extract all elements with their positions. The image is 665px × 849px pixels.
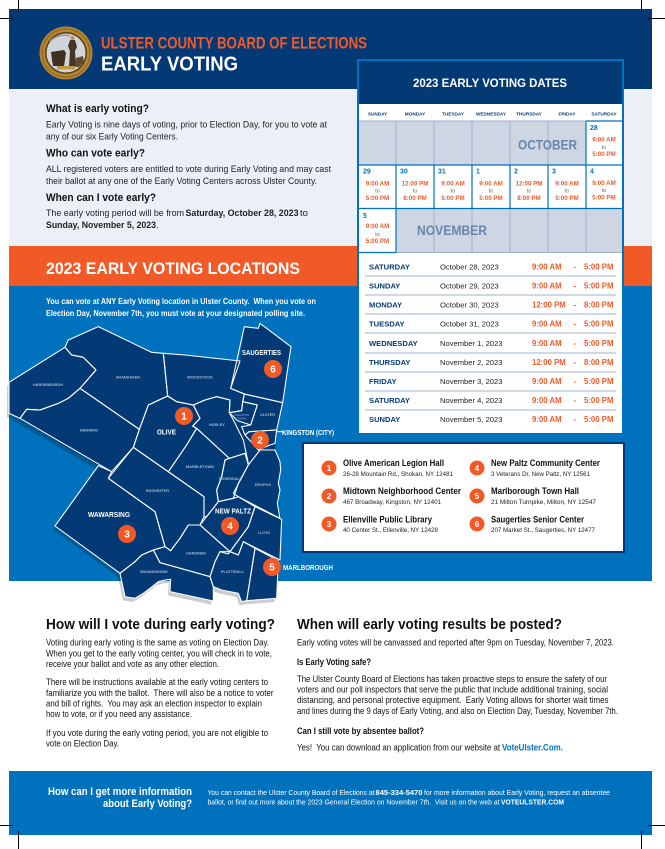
legend marker 3: [322, 516, 336, 532]
schedule list: FRIDAY: [369, 377, 397, 386]
calendar week: Oct 29 to Nov 4: 8:00 PM: [517, 195, 541, 202]
schedule list: -: [574, 301, 576, 310]
schedule list: -: [574, 358, 576, 367]
legend entry 5: 21 Milton Turnpike, Milton, NY 12547: [491, 499, 596, 506]
text: who can vote answer: ALL registered voters are entitled to vote during Early Voting and may cast: [46, 164, 331, 175]
heading: calendar title: 2023 EARLY VOTING DATES: [413, 76, 567, 90]
footer contact text: You can contact the Ulster County Board of Elections at: [208, 788, 375, 797]
panel: location legend: [303, 443, 624, 552]
schedule list: 8:00 PM: [584, 358, 613, 367]
calendar week: Oct 29 to Nov 4: 9:00 AM: [441, 180, 465, 187]
map labels: towns with voting centers: MARLBOROUGH: [283, 565, 333, 572]
legend marker 5: 5: [475, 492, 480, 501]
calendar week: Oct 29 to Nov 4: 8:00 PM: [403, 195, 427, 202]
banner: locations heading: 2023 EARLY VOTING LOCATIONS: [46, 260, 300, 278]
heading: how will I vote: How will I vote during early voting?: [46, 616, 275, 633]
calendar day: Nov 5: to: [375, 232, 380, 238]
footer contact text: for more information about Early Voting, request an absentee: [424, 788, 610, 797]
schedule list: -: [574, 377, 576, 386]
legend marker 2: 2: [327, 492, 332, 501]
schedule list: 9:00 AM: [532, 263, 562, 272]
legend entry 3: 40 Center St., Ellenville, NY 12428: [343, 527, 438, 534]
panel: early voting dates: [358, 60, 623, 434]
schedule list: November 5, 2023: [440, 415, 502, 424]
map labels: towns with voting centers: WAWARSING: [88, 512, 131, 519]
legend entry 6: [491, 515, 595, 534]
heading: what is early voting: What is early voting?: [46, 103, 149, 115]
schedule list: MONDAY: [369, 301, 402, 310]
text: safety body: voters and our poll inspectors that serve the public that include additional training, social: [297, 685, 608, 695]
text: how will I vote body: familiarize you with the ballot. There will also be a notice to voter: [46, 688, 274, 698]
schedule list: October 31, 2023: [440, 320, 499, 329]
schedule list: -: [574, 396, 576, 405]
legend marker 1: [322, 460, 336, 476]
calendar day: Nov 5: 5: [363, 213, 367, 220]
legend marker 4: 4: [475, 464, 480, 473]
schedule list: October 30, 2023: [440, 301, 499, 310]
text: how will I vote body: When you get to the early voting center, you will check in to vote,: [46, 648, 272, 658]
map labels: towns with voting centers: OLIVE: [157, 430, 176, 437]
footer heading: about Early Voting?: [103, 798, 192, 810]
calendar day: Oct 28: to: [602, 145, 606, 151]
text: how will I vote body: receive your ballot and vote as any other election.: [46, 659, 219, 669]
banner: locations heading: [9, 246, 652, 286]
legend marker 4: [470, 460, 484, 476]
heading: calendar title: [359, 61, 622, 104]
calendar week: Oct 29 to Nov 4: to: [375, 188, 380, 194]
schedule list: -: [574, 415, 576, 424]
schedule list: -: [574, 339, 576, 348]
map markers: [118, 360, 282, 576]
footer heading: [48, 786, 192, 810]
text: results body: Early voting votes will be canvassed and reported after 9pm on Tuesday, November 7, 2023.: [297, 638, 614, 648]
map labels: small towns: ROSENDALE: [219, 476, 242, 481]
text: how will I vote body: There will be instructions available at the early voting centers to: [46, 677, 268, 687]
text: how will I vote body: [46, 638, 274, 749]
map: Ulster County towns: [7, 323, 334, 605]
map labels: towns with voting centers: SAUGERTIES: [242, 350, 281, 357]
legend entry 2: Midtown Neighborhood Center: [343, 486, 461, 496]
calendar weekday row: WEDNESDAY: [476, 112, 507, 117]
calendar week: Oct 29 to Nov 4: 12:00 PM: [516, 180, 542, 187]
text: safety body: [297, 674, 618, 716]
calendar day: Nov 5: 5:00 PM: [366, 238, 389, 245]
calendar week: Oct 29 to Nov 4: to: [602, 188, 606, 194]
legend entry 2: [343, 486, 461, 506]
legend marker 5: [470, 488, 484, 504]
legend entry 3: [343, 515, 438, 534]
schedule list: 8:00 PM: [584, 301, 613, 310]
footer band: [9, 771, 652, 835]
month label: October: OCTOBER: [518, 137, 577, 153]
schedule list: [365, 263, 616, 424]
footer contact text: ballot, or find out more about the 2023 General Election on November 7th. Visit us on the web at: [208, 798, 500, 806]
schedule list: SUNDAY: [369, 415, 400, 424]
schedule list: 9:00 AM: [532, 415, 562, 424]
text: what is early voting answer: any of our six Early Voting Centers.: [46, 132, 178, 142]
legend entry 3: Ellenville Public Library: [343, 515, 432, 525]
title: organisation: ULSTER COUNTY BOARD OF ELECTIONS: [101, 35, 367, 53]
legend entry 5: [491, 486, 596, 506]
text: how will I vote body: Voting during early voting is the same as voting on Election Day.: [46, 638, 269, 648]
schedule list: 12:00 PM: [532, 301, 566, 310]
calendar week: Oct 29 to Nov 4: to: [451, 188, 455, 194]
legend entry 1: [343, 458, 453, 478]
schedule list: THURSDAY: [369, 358, 410, 367]
schedule list: SATURDAY: [369, 396, 410, 405]
footer contact text: 845-334-5470: [376, 788, 422, 797]
text: locations intro: [46, 297, 316, 318]
schedule list: 9:00 AM: [532, 339, 562, 348]
calendar week: Oct 29 to Nov 4: 29: [363, 169, 371, 176]
heading: absentee ballot: Can I still vote by absentee ballot?: [297, 726, 424, 736]
map markers: 3: [124, 530, 130, 541]
icon: county seal: [40, 26, 92, 80]
schedule list: 9:00 AM: [532, 282, 562, 291]
calendar day: Oct 28: [590, 125, 616, 158]
text: safety body: distancing, and personal protective equipment. Early Voting allows for shorter wait times: [297, 695, 609, 705]
schedule list: -: [574, 263, 576, 272]
schedule list: November 4, 2023: [440, 396, 502, 405]
legend entry 1: Olive American Legion Hall: [343, 458, 444, 468]
schedule list: 5:00 PM: [584, 282, 613, 291]
calendar week: Oct 29 to Nov 4: 3: [552, 169, 556, 176]
map labels: small towns: ESOPUS: [255, 482, 271, 487]
legend entry 4: New Paltz Community Center: [491, 458, 600, 468]
calendar week: Oct 29 to Nov 4: 5:00 PM: [366, 195, 389, 202]
panel: early voting FAQ: [9, 89, 652, 246]
text: locations intro: You can vote at ANY Early Voting location in Ulster County. When you vote on: [46, 297, 316, 306]
legend entry 6: 207 Market St., Saugerties, NY 12477: [491, 527, 595, 534]
calendar weekday row: THURSDAY: [516, 112, 543, 117]
map labels: towns with voting centers: [88, 350, 334, 572]
heading: when can I vote early: When can I vote early?: [46, 192, 156, 204]
legend marker 6: 6: [475, 520, 480, 529]
schedule list: 5:00 PM: [584, 263, 613, 272]
schedule list: 5:00 PM: [584, 415, 613, 424]
calendar week: Oct 29 to Nov 4: 12:00 PM: [402, 180, 428, 187]
map labels: small towns: LLOYD: [258, 530, 270, 535]
heading: is early voting safe: Is Early Voting safe?: [297, 657, 371, 667]
schedule list: 9:00 AM: [532, 396, 562, 405]
calendar week: Oct 29 to Nov 4: 31: [438, 169, 446, 176]
map labels: small towns: WOODSTOCK: [187, 374, 213, 380]
calendar week: Oct 29 to Nov 4: 1: [476, 169, 480, 176]
calendar week: Oct 29 to Nov 4: 9:00 AM: [366, 180, 389, 187]
calendar weekday row: SUNDAY: [368, 112, 388, 117]
text: absentee body: VoteUlster.Com.: [502, 743, 563, 753]
heading: who can vote early: Who can vote early?: [46, 148, 145, 160]
text: what is early voting answer: [46, 120, 327, 142]
calendar week: Oct 29 to Nov 4: to: [489, 188, 493, 194]
schedule list: October 29, 2023: [440, 282, 499, 291]
map labels: small towns: KINGSTON: [234, 413, 249, 417]
map markers: 4: [227, 522, 233, 533]
calendar day: Nov 5: [363, 213, 389, 245]
text: locations intro: Election Day, November 7th, you must vote at your designated polling site.: [46, 309, 305, 318]
map labels: small towns: DENNING: [80, 428, 98, 432]
map labels: small towns: ROCHESTER: [146, 488, 169, 493]
panel: locations background: [9, 286, 652, 581]
map markers: 1: [181, 412, 187, 423]
calendar day: Oct 28: 9:00 AM: [592, 136, 616, 144]
text: safety body: and lines during the 9 days of Early Voting, and also on Election Day, Tuesday, November 7th.: [297, 706, 618, 716]
text: how will I vote body: vote on Election Day.: [46, 739, 119, 749]
footer heading: How can I get more information: [48, 786, 192, 798]
calendar week: Oct 29 to Nov 4: to: [565, 188, 569, 194]
calendar weekday row: [368, 112, 618, 117]
text: how will I vote body: how to vote, or if you need any assistance.: [46, 709, 192, 719]
text: when answer: .: [156, 220, 159, 231]
calendar day: Oct 28: 5:00 PM: [592, 151, 616, 158]
schedule list: 12:00 PM: [532, 358, 566, 367]
map labels: small towns: ULSTER: [260, 412, 275, 417]
schedule list: SUNDAY: [369, 282, 400, 291]
calendar week: Oct 29 to Nov 4: 5:00 PM: [441, 195, 465, 202]
calendar week: Oct 29 to Nov 4: 9:00 AM: [592, 180, 616, 187]
month label: November: NOVEMBER: [417, 222, 487, 238]
text: when answer: [46, 208, 308, 231]
map labels: small towns: HURLEY: [209, 422, 225, 427]
text: how will I vote body: If you vote during the early voting period, you are not eligible to: [46, 728, 268, 738]
calendar day: Oct 28: 28: [590, 125, 598, 132]
header band: [9, 9, 652, 89]
legend entry 6: Saugerties Senior Center: [491, 515, 584, 525]
legend entry 4: [491, 458, 600, 478]
map labels: small towns: SHAWANGUNK: [140, 569, 168, 574]
calendar week: Oct 29 to Nov 4: 4: [590, 169, 594, 176]
text: safety body: The Ulster County Board of Elections has taken proactive steps to ensure the safety of our: [297, 674, 607, 684]
text: what is early voting answer: Early Voting is nine days of voting, prior to Election Day, for you to vote at: [46, 120, 327, 130]
map labels: small towns: SHANDAKEN: [116, 375, 140, 380]
schedule list: November 2, 2023: [440, 358, 502, 367]
legend marker 6: [470, 516, 484, 532]
schedule list: November 1, 2023: [440, 339, 502, 348]
legend entry 1: 26-28 Mountain Rd., Shokan, NY 12481: [343, 471, 453, 478]
schedule list: 9:00 AM: [532, 320, 562, 329]
heading: results posted: When will early voting results be posted?: [297, 616, 562, 633]
legend marker 3: 3: [327, 520, 332, 529]
calendar week: Oct 29 to Nov 4: 9:00 AM: [479, 180, 503, 187]
schedule list: 5:00 PM: [584, 377, 613, 386]
map labels: small towns: MARBLETOWN: [186, 464, 214, 469]
text: absentee body: Yes! You can download an application from our website at: [297, 743, 500, 753]
calendar week: Oct 29 to Nov 4: 9:00 AM: [555, 180, 579, 187]
map labels: small towns: TOWN: [237, 416, 246, 420]
text: when answer: to: [300, 208, 308, 219]
title: early voting: EARLY VOTING: [101, 54, 238, 76]
schedule list: October 28, 2023: [440, 263, 499, 272]
calendar week: Oct 29 to Nov 4: to: [413, 188, 417, 194]
calendar grid: [359, 121, 622, 252]
calendar week: Oct 29 to Nov 4: 2: [514, 169, 518, 176]
calendar week: Oct 29 to Nov 4: 5:00 PM: [592, 194, 616, 202]
calendar week: Oct 29 to Nov 4: 30: [400, 169, 408, 176]
map labels: small towns: PLATTEKILL: [221, 569, 245, 574]
calendar week: Oct 29 to Nov 4: 5:00 PM: [555, 195, 579, 202]
calendar week: Oct 29 to Nov 4: to: [527, 188, 531, 194]
map labels: small towns: [33, 374, 275, 574]
text: when answer: The early voting period will be from: [46, 208, 184, 219]
text: when answer: Sunday, November 5, 2023: [46, 220, 156, 231]
calendar week: Oct 29 to Nov 4: 5:00 PM: [479, 195, 503, 202]
legend entry 4: 3 Veterans Dr, New Paltz, NY 12561: [491, 471, 590, 478]
calendar weekday row: MONDAY: [405, 112, 426, 117]
schedule list: 5:00 PM: [584, 320, 613, 329]
legend entry 2: 467 Broadway, Kingston, NY 12401: [343, 499, 441, 506]
map labels: towns with voting centers: NEW PALTZ: [215, 509, 252, 516]
text: when answer: Saturday, October 28, 2023: [186, 208, 298, 219]
map labels: towns with voting centers: KINGSTON (CITY): [282, 430, 334, 437]
map labels: small towns: HARDENBURGH: [33, 382, 63, 387]
footer contact text: VOTEULSTER.COM: [501, 798, 564, 806]
schedule list: 9:00 AM: [532, 377, 562, 386]
schedule list: TUESDAY: [369, 320, 405, 329]
text: how will I vote body: and bill of rights. You may ask an election inspector to explain: [46, 699, 262, 709]
map markers: 6: [270, 365, 276, 376]
schedule list: 5:00 PM: [584, 396, 613, 405]
text: who can vote answer: [46, 164, 331, 187]
text: who can vote answer: their ballot at any one of the Early Voting Centers across Ulster County.: [46, 176, 317, 187]
legend marker 2: [322, 488, 336, 504]
legend marker 1: 1: [327, 464, 332, 473]
map markers: 5: [269, 563, 275, 574]
schedule list: SATURDAY: [369, 263, 410, 272]
schedule list: 5:00 PM: [584, 339, 613, 348]
legend entry 5: Marlborough Town Hall: [491, 486, 579, 496]
map labels: small towns: GARDINER: [186, 550, 206, 556]
calendar week: Oct 29 to Nov 4: [363, 169, 616, 202]
calendar day: Nov 5: 9:00 AM: [366, 223, 389, 230]
calendar weekday row: SATURDAY: [591, 112, 618, 117]
calendar weekday row: TUESDAY: [442, 112, 465, 117]
schedule list: -: [574, 282, 576, 291]
schedule list: WEDNESDAY: [369, 339, 418, 348]
calendar weekday row: FRIDAY: [558, 112, 576, 117]
schedule list: -: [574, 320, 576, 329]
map markers: 2: [257, 436, 263, 447]
schedule list: November 3, 2023: [440, 377, 502, 386]
footer contact text: [208, 788, 610, 806]
